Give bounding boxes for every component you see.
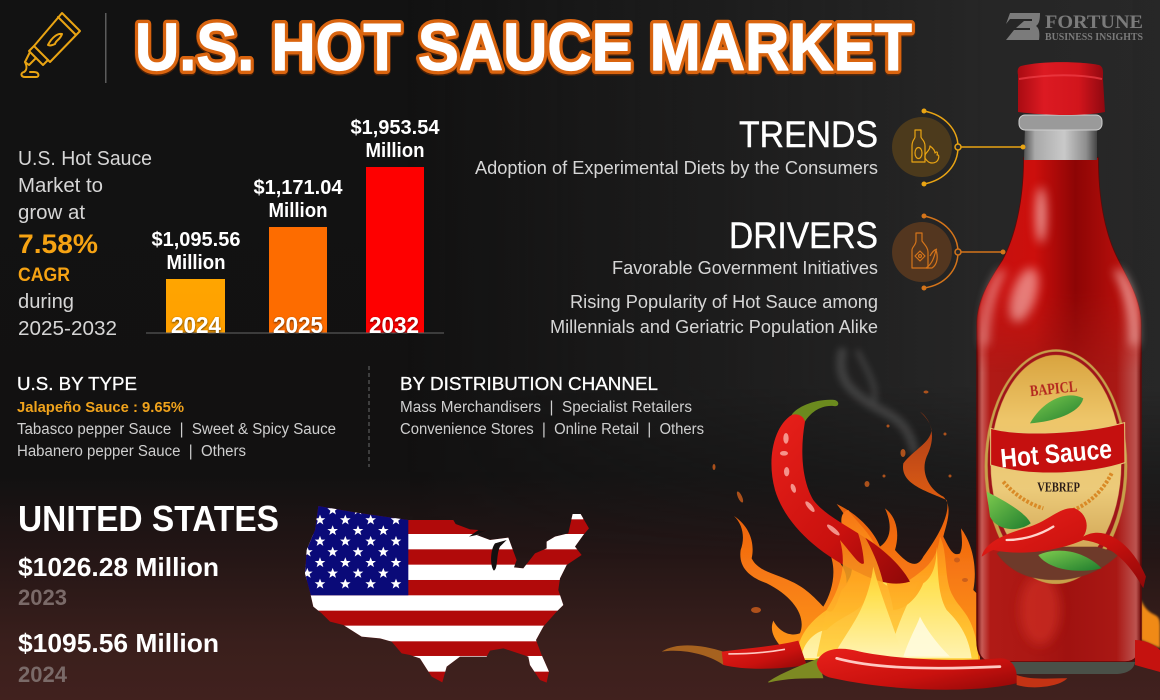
flames (734, 412, 980, 660)
bottle cap (1018, 62, 1105, 115)
value labels (152, 117, 440, 274)
year labels (171, 312, 419, 338)
chili: right side (1135, 640, 1160, 672)
united states figures: 2024 (18, 662, 68, 687)
CAGR text block: Market to (18, 174, 103, 197)
CAGR text block (18, 147, 152, 340)
by distribution channel panel: Convenience Stores | Online Retail | Others (400, 421, 704, 438)
CAGR text block: during (18, 290, 74, 313)
value labels: $1,171.04 (254, 177, 343, 199)
bottle shoulder shading (977, 158, 1141, 375)
value labels: Million (166, 252, 226, 274)
united states figures: UNITED STATES (18, 498, 279, 539)
value labels: $1,095.56 (152, 229, 240, 251)
CAGR text block: 2025-2032 (18, 317, 117, 340)
bottle label (982, 349, 1146, 588)
chili: bottom left (662, 641, 807, 669)
bottle glass neck (1024, 126, 1097, 160)
year labels: 2024 (171, 312, 221, 338)
title: U.S. HOT SAUCE MARKET (135, 10, 912, 85)
value labels: $1,953.54 (350, 117, 440, 139)
bottle highlights (982, 187, 1137, 645)
red banner with product name: Hot Sauce (999, 434, 1113, 474)
leaves (987, 492, 1031, 529)
label lower text: VEBREP (1037, 481, 1080, 496)
flame core (847, 597, 950, 657)
title: U.S. HOT SAUCE MARKET (135, 11, 912, 86)
drivers text: DRIVERS (729, 215, 878, 256)
year labels: 2025 (273, 312, 323, 338)
drivers text (550, 215, 878, 337)
united states figures: $1095.56 Million (18, 628, 219, 658)
logo: Fortune Business Insights (1006, 12, 1143, 43)
chili: large curved (771, 400, 910, 584)
united states figures: $1026.28 Million (18, 552, 219, 582)
bar 2032 (366, 167, 424, 333)
label chili (982, 508, 1146, 588)
by distribution channel panel: BY DISTRIBUTION CHANNEL (400, 373, 658, 394)
middle flame (798, 510, 978, 660)
label wheat decoration (1003, 473, 1112, 510)
CAGR text block: CAGR (18, 265, 70, 286)
CAGR text block: U.S. Hot Sauce (18, 147, 152, 170)
drivers text: Favorable Government Initiatives (612, 258, 878, 278)
lower dark part of label (997, 547, 1120, 580)
trends text: TRENDS (739, 114, 878, 155)
by type panel (17, 373, 336, 460)
flame over chili (817, 510, 920, 657)
smoke (841, 352, 914, 450)
label oval (985, 349, 1127, 584)
bottle base (1000, 662, 1135, 674)
value labels: Million (366, 140, 424, 162)
by type panel: Habanero pepper Sauce | Others (17, 443, 246, 460)
drivers text: Millennials and Geriatric Population Alike (550, 317, 878, 337)
by distribution channel panel (400, 373, 704, 438)
inner flame (802, 547, 972, 658)
title: U.S. HOT SAUCE MARKET (135, 10, 912, 85)
bar 2025 (269, 227, 327, 333)
united states figures (18, 498, 279, 687)
label top text: BAPICL (1029, 379, 1078, 400)
outer flame (734, 412, 980, 660)
sparks (712, 390, 968, 613)
right side flame (1141, 600, 1160, 648)
trends text: Adoption of Experimental Diets by the Consumers (475, 158, 878, 178)
drivers icon (892, 214, 1006, 290)
chili: bottom front (768, 649, 1067, 690)
by type panel: U.S. BY TYPE (17, 373, 137, 394)
label leaf (1030, 395, 1083, 423)
year labels: 2032 (369, 312, 419, 338)
header icon: sauce bottle (21, 13, 80, 77)
trends text (475, 114, 878, 178)
bottle (977, 62, 1141, 674)
logo: Fortune Business Insights: BUSINESS INSIGHTS (1045, 32, 1143, 43)
CAGR text block: 7.58% (18, 229, 98, 259)
united states figures: 2023 (18, 585, 67, 610)
bottle body (977, 158, 1141, 662)
CAGR text block: grow at (18, 201, 85, 224)
trends icon (892, 108, 1026, 186)
flag map of the USA (300, 503, 593, 690)
bar 2024 (166, 279, 225, 333)
bar chart (146, 117, 444, 338)
by type panel: Tabasco pepper Sauce | Sweet & Spicy Sauce (17, 421, 336, 438)
by type panel: Jalapeño Sauce : 9.65% (17, 399, 184, 416)
bottle neck ring (1019, 115, 1102, 130)
value labels: Million (268, 200, 328, 222)
header divider (105, 13, 106, 83)
drivers text: Rising Popularity of Hot Sauce among (570, 292, 878, 312)
by distribution channel panel: Mass Merchandisers | Specialist Retailers (400, 399, 692, 416)
logo: Fortune Business Insights: FORTUNE (1045, 12, 1143, 33)
